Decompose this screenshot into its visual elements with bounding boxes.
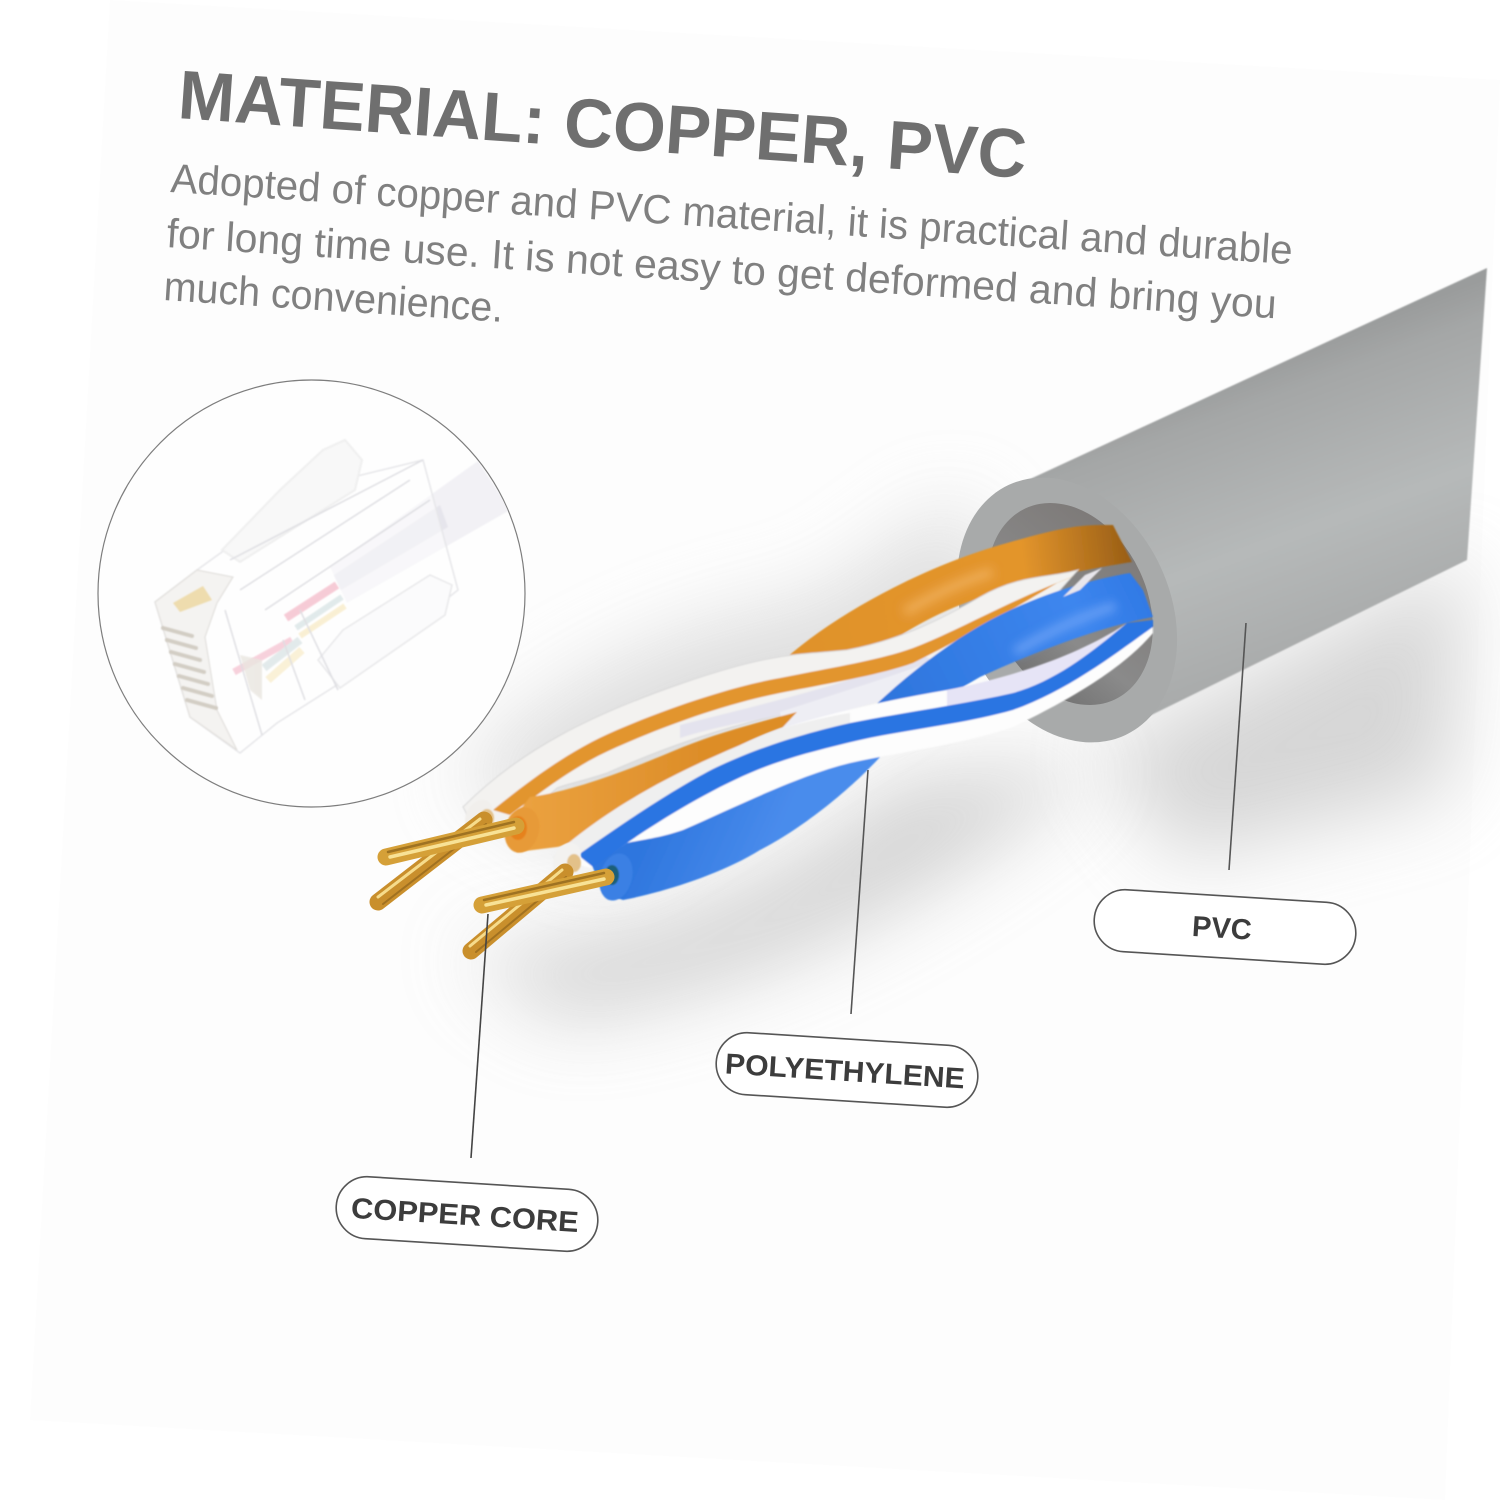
tube end ring (915, 441, 1219, 779)
PVC tube (915, 268, 1487, 779)
infographic canvas (97, 71, 1492, 1252)
copper conductor, rear blue pair (470, 870, 566, 952)
copper core leader line (471, 914, 488, 1158)
solid orange wire, upper arc (785, 525, 1132, 665)
copper conductor, front orange pair (386, 822, 516, 857)
connector transparent body (155, 440, 458, 753)
copper conductor, front blue pair (482, 873, 606, 905)
label: PVC: PVC (1191, 911, 1253, 947)
white wire with blue stripe (552, 620, 1153, 870)
label: copper core: COPPER CORE (350, 1193, 580, 1239)
connector wires (234, 585, 345, 680)
twisted wires (463, 525, 1153, 900)
label: PVC (1092, 888, 1358, 966)
description text (162, 155, 1294, 331)
description text: Adopted of copper and PVC material, it is practical and durable (169, 155, 1294, 273)
solid orange wire, lower section (505, 712, 797, 852)
solid blue wire, upper section (860, 568, 1153, 720)
copper conductor, rear orange pair (378, 819, 486, 904)
label: polyethylene (714, 1031, 980, 1109)
wire end caps (460, 795, 638, 904)
tube hole (956, 476, 1184, 732)
lavender gap between the pairs (780, 665, 940, 728)
leader line: polyethylene (851, 770, 868, 1014)
inset circle: RJ45 connector (98, 380, 525, 807)
description text: much convenience. (162, 263, 505, 331)
copper conductors (378, 819, 606, 1158)
label: polyethylene: POLYETHYLENE (724, 1048, 966, 1095)
connector cable (334, 461, 508, 590)
solid blue wire, lower section (590, 720, 880, 900)
connector gold contacts (163, 628, 216, 708)
white wire with orange stripe (463, 570, 1078, 835)
tube body (1015, 268, 1487, 728)
label: copper core (334, 1175, 600, 1253)
description text: for long time use. It is not easy to get deformed and bring you (165, 210, 1278, 327)
title: MATERIAL: COPPER, PVC (176, 56, 1029, 193)
leader line: PVC (1229, 623, 1246, 870)
ambient shadows around cable (460, 500, 1466, 1020)
